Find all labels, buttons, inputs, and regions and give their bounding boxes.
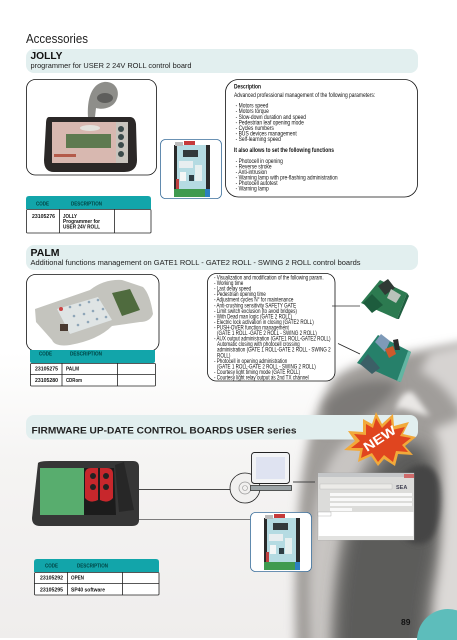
panel: PALM functions list: - Limit switch exclusion (to avoid bridges) [214,308,297,315]
panel: PALM functions list: - PUSH-OVER function management [214,325,289,332]
decorative teal corner circle [417,609,457,640]
panel: description: Advanced professional management of the following parameters: [234,93,376,99]
panel: description: - Reverse stroke [236,164,272,171]
panel: description: - Self-learning speed [236,137,281,143]
table: JOLLY codes: USER 24V ROLL [63,224,100,230]
panel: description: - BUS devices management [236,131,297,138]
panel: description: Description [234,84,261,91]
table: JOLLY codes: 23105276 [32,214,55,220]
connector line to board thumbnail [139,518,251,520]
panel: PALM functions list: administration (GATE 1 ROLL-GATE 2 ROLL - SWING 2 [217,347,331,354]
panel: PALM heading band: Additional functions management on GATE1 ROLL - GATE2 ROLL - SWING 2 ROLL control boards [30,258,361,267]
panel: firmware heading band: FIRMWARE UP-DATE CONTROL BOARDS USER series [32,426,296,436]
image: software screenshot: SEA [396,485,407,491]
panel: PALM functions list: - Courtesy light relay output as 2nd TX channel [214,375,309,382]
image: JOLLY programmer device [26,80,156,175]
connector line to screenshot [293,481,315,483]
panel: description: - Motors torque [236,109,269,115]
panel: description: - Cycles numbers [236,125,274,132]
badge: NEW starburst: NEW [360,422,400,455]
image: control board thumbnail 2 [250,512,312,572]
panel: description: - Anti-intrusion [236,170,267,176]
table: firmware codes: CODE [45,564,58,570]
panel: PALM functions list: - Electric lock activation in closing (GATE2 ROLL) [214,319,314,326]
table: JOLLY codes: Programmer for [63,219,101,225]
panel: PALM functions list: - With Dead man logic (GATE 2 ROLL) [214,314,292,321]
panel: PALM functions list: Automatic closing with photocell crossing [217,342,300,348]
panel: PALM functions list: ROLL) [217,353,231,360]
panel: description: - Warning lamp with pre-flashing administration [236,175,338,182]
panel: description [226,80,418,197]
panel: PALM heading band: PALM [30,247,60,259]
panel: PALM functions list: - Last delay speed [214,286,251,293]
table: PALM codes: CODE [39,352,52,358]
table: PALM codes: PALM [66,366,79,372]
panel: description: - Pedestrian leaf opening mode [236,120,304,127]
panel: PALM functions list: - Visualization and modification of the following param. [214,275,324,282]
panel: PALM functions list: - AUX output administration (GATE1 ROLL-GATE2 ROLL) [214,336,331,343]
connector line to CD [139,488,231,490]
panel: firmware heading band [26,415,418,440]
table: JOLLY codes: JOLLY [63,214,77,220]
table: firmware codes: 23105292 [40,576,63,582]
panel: JOLLY heading band: JOLLY [30,50,62,62]
image: control board thumbnail [160,140,222,198]
image: PALM handheld [26,274,159,351]
table: firmware codes: SP40 software [71,588,105,594]
table: PALM codes: DESCRIPTION [70,352,102,358]
table: JOLLY codes: DESCRIPTION [71,202,102,208]
panel: JOLLY heading band: programmer for USER 2 24V ROLL control board [30,61,192,70]
table: firmware codes [34,559,159,595]
panel: description: - Photocell in opening [236,159,283,165]
panel: PALM functions list: - Adjustment cycles N° for maintenance [214,297,293,304]
page background with blurred metal swirl photo [0,337,457,638]
panel: description: - Photocell autotest [236,181,278,187]
panel: PALM heading band [26,245,418,270]
panel: description: It also allows to set the following functions [234,148,334,154]
table: JOLLY codes [26,196,151,233]
table: PALM codes: CDRom [66,378,82,384]
panel: PALM functions list: - Pedestrian opening time [214,292,266,298]
page number: 89 [401,617,411,627]
panel: PALM functions list: (GATE 1 ROLL-GATE 2 ROLL - SWING 2 ROLL) [217,364,316,371]
table: firmware codes: OPEN [71,576,84,582]
badge: NEW starburst [344,412,416,466]
table: firmware codes: 23105295 [40,588,63,594]
panel: PALM functions list: (GATE 1 ROLL -GATE 2 ROLL - SWING 2 ROLL) [217,331,317,337]
table: PALM codes: 23105280 [35,378,58,384]
panel: PALM functions list: - Anti-crushing sensitivity SAFETY GATE [214,303,297,310]
panel: description: - Slow-down duration and speed [236,114,306,121]
image: circuit board 2 [357,334,411,382]
panel: description: - Motors speed [236,103,268,110]
table: JOLLY codes: CODE [36,202,49,208]
title: Accessories [26,31,88,46]
panel: PALM functions list: - Courtesy light timing mode (GATE ROLL) [214,369,300,376]
table: PALM codes: 23105275 [35,366,58,372]
table: firmware codes: DESCRIPTION [77,564,108,570]
panel: JOLLY heading band [26,49,418,73]
image: firmware programmer with remote [32,461,139,526]
icon: CD [230,473,260,503]
icon: computer [250,452,292,490]
panel: PALM functions list [208,274,335,382]
panel: PALM functions list: - Working time [214,280,243,287]
image: circuit board 1 [361,279,409,319]
connector line to board 2 [338,344,360,354]
panel: PALM functions list: - Photocell in opening administration [214,358,287,365]
table: PALM codes [30,350,156,386]
connector line to board 1 [332,305,360,307]
panel: description: - Warning lamp [236,186,269,193]
image: software screenshot [318,473,414,540]
